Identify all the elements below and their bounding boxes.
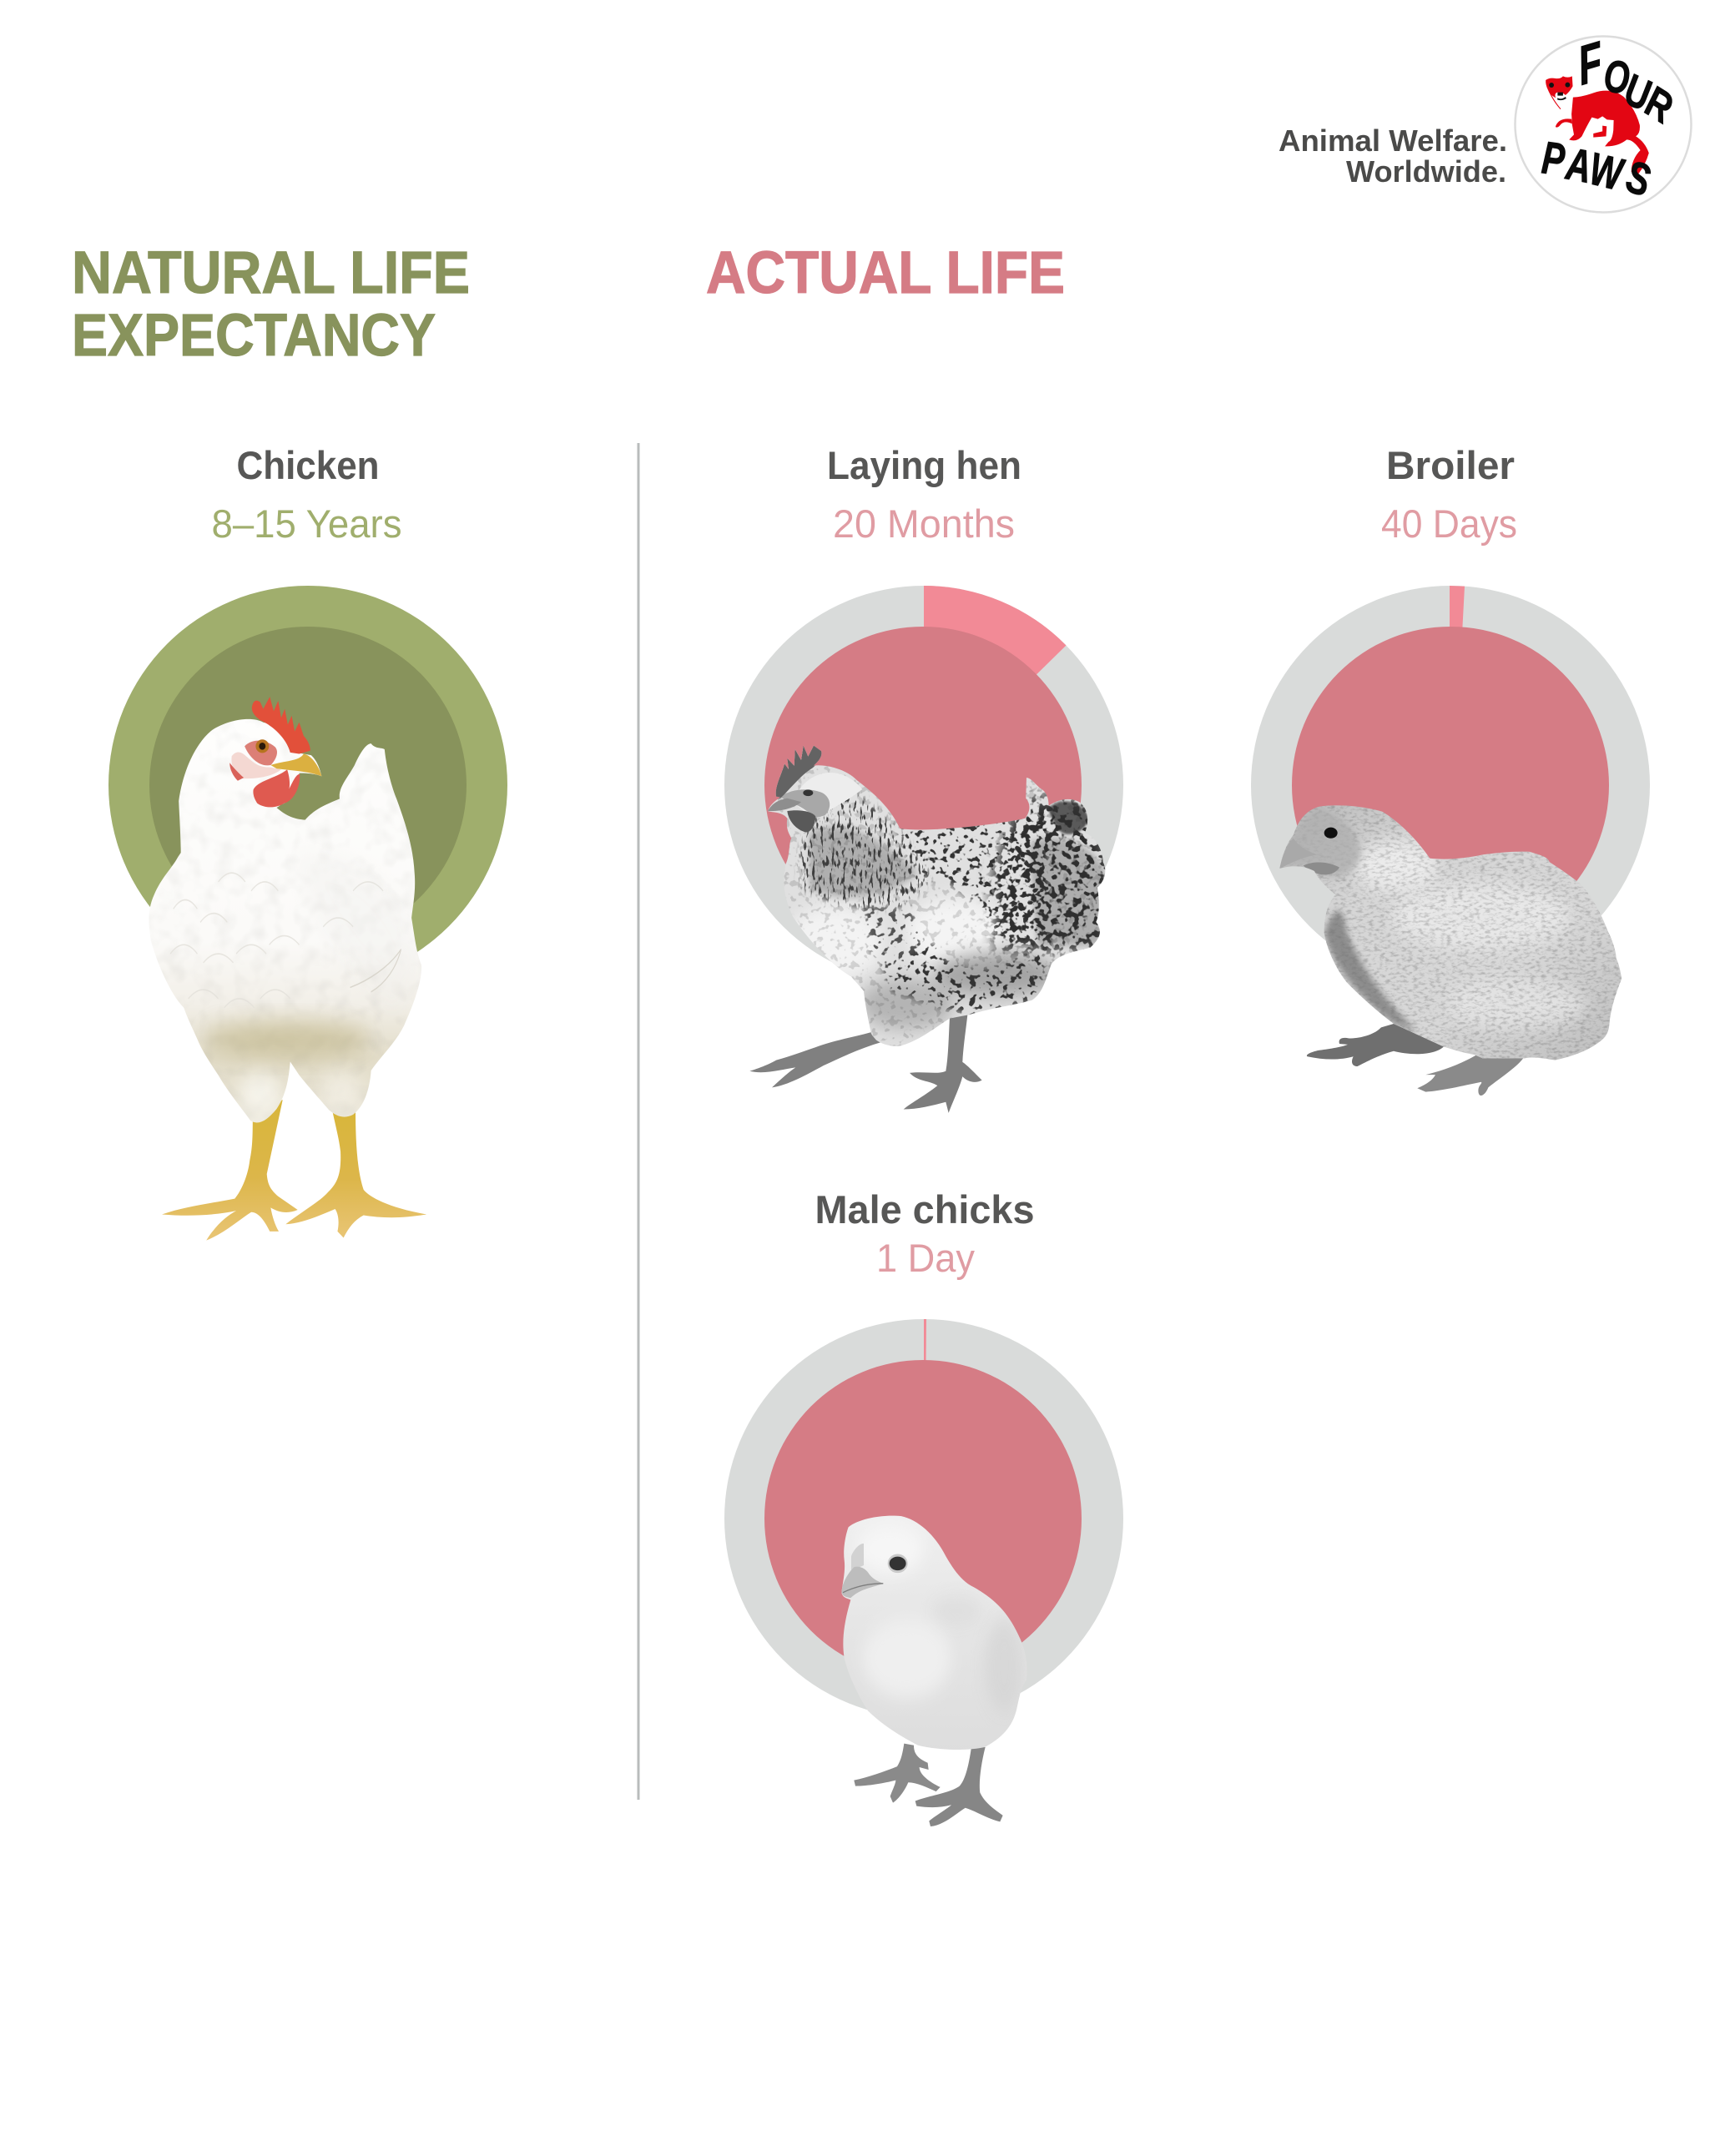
left leg: [162, 1100, 298, 1241]
label: Male chicks: Male chicks: [815, 1187, 1035, 1232]
shading: [796, 904, 881, 976]
right leg: [285, 1106, 426, 1237]
logo badge circle: [1516, 37, 1691, 212]
head: [798, 773, 863, 811]
photo: grey speckled laying hen: [749, 742, 1110, 1113]
beak: [1279, 839, 1317, 869]
speckles: body: [765, 742, 1110, 1055]
front leg: [749, 1030, 882, 1087]
heading: natural life expectancy: [72, 240, 470, 369]
cheek: [1304, 862, 1339, 874]
value: 1 Day: 1 Day: [876, 1236, 975, 1280]
head shading: [1279, 807, 1360, 877]
value: 8–15 Years: 8–15 Years: [212, 501, 402, 546]
value: 40 Days: 40 Days: [1381, 501, 1517, 546]
wattle: [253, 769, 300, 807]
comb: [774, 746, 822, 800]
panel: chicken natural life: [108, 443, 507, 1241]
feathered body: [765, 742, 1110, 1055]
chart: 1 day ring: [724, 1319, 1123, 1718]
body: [144, 711, 428, 1129]
logo wordmark: FOUR: R: [1641, 75, 1677, 135]
eye: [255, 739, 269, 753]
logo: Four Paws with tagline: [1279, 30, 1691, 212]
front foot: [1417, 1047, 1525, 1096]
logo wordmark: FOUR: F: [1574, 30, 1607, 98]
logo wordmark: FOUR: O: [1601, 50, 1632, 105]
chart: full green ring: [108, 586, 507, 985]
label: Broiler: Broiler: [1386, 443, 1515, 487]
eye: [1324, 828, 1338, 839]
chart: 20 months ring: [724, 586, 1123, 985]
forehead patch: [851, 1544, 864, 1573]
photo: grey chick: [837, 1513, 1032, 1826]
panel: laying hen actual life: [724, 443, 1123, 1113]
dark tail tuft: [1049, 801, 1089, 834]
right foot: [915, 1747, 1003, 1826]
tagline: Animal Welfare.: [1279, 123, 1507, 158]
body: [837, 1513, 1032, 1753]
speckles: neck hackles: [794, 791, 933, 914]
icon: red marten: [1546, 76, 1649, 174]
heading: natural life expectancy: EXPECTANCY: [72, 303, 436, 369]
divider: [638, 443, 639, 1800]
eye: [888, 1554, 908, 1573]
wattle: [787, 810, 815, 832]
body: [1277, 800, 1625, 1065]
panel: broiler actual life: [1251, 443, 1650, 1096]
heading: actual life: ACTUAL LIFE: [706, 240, 1065, 306]
comb: [252, 697, 310, 753]
heading: natural life expectancy: NATURAL LIFE: [72, 240, 470, 306]
beak: [841, 1567, 883, 1598]
left foot: [854, 1744, 941, 1803]
tagline: Worldwide.: [1346, 154, 1506, 189]
chart: 40 days ring: [1251, 586, 1650, 985]
beak: [768, 798, 801, 811]
label: Laying hen: Laying hen: [827, 443, 1021, 487]
beak: [270, 753, 321, 776]
logo wordmark: PAWS: PAWS: [1540, 132, 1654, 208]
standing leg: [904, 1010, 982, 1113]
face: [231, 753, 281, 778]
tagline: [1279, 123, 1507, 189]
photo: grey broiler chicken: [1277, 800, 1625, 1096]
panel: male chicks actual life: [724, 1187, 1123, 1826]
speckles: tail: [981, 781, 1105, 966]
logo wordmark: FOUR: [1574, 30, 1677, 135]
logo wordmark: FOUR: U: [1621, 63, 1655, 123]
label: Chicken: Chicken: [237, 443, 379, 487]
photo: white chicken: [144, 697, 428, 1241]
rear foot: [1307, 1024, 1444, 1066]
value: 20 Months: 20 Months: [833, 501, 1015, 546]
